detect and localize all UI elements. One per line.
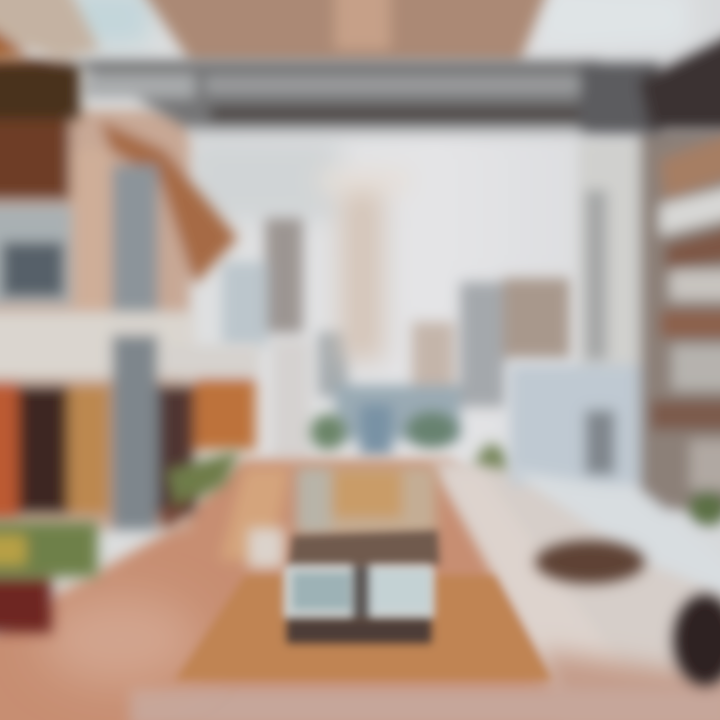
sofa back [288, 530, 440, 568]
right building [510, 130, 720, 600]
sky patches at top [70, 0, 690, 220]
floor [0, 460, 720, 720]
distant greenery [310, 405, 510, 512]
overhead beam [70, 60, 660, 136]
top canopy [135, 0, 552, 62]
left planters [0, 450, 240, 633]
rug [175, 575, 552, 680]
sofa table top [296, 466, 436, 536]
right foreground furniture [535, 540, 720, 686]
sofa cushions [284, 565, 434, 620]
left building [0, 60, 260, 530]
sofa base [286, 618, 432, 644]
top left roof corner [0, 0, 100, 119]
sofa [284, 466, 440, 644]
central tower [318, 170, 410, 360]
distant skyline [222, 218, 570, 460]
top right dark corner [640, 30, 720, 130]
